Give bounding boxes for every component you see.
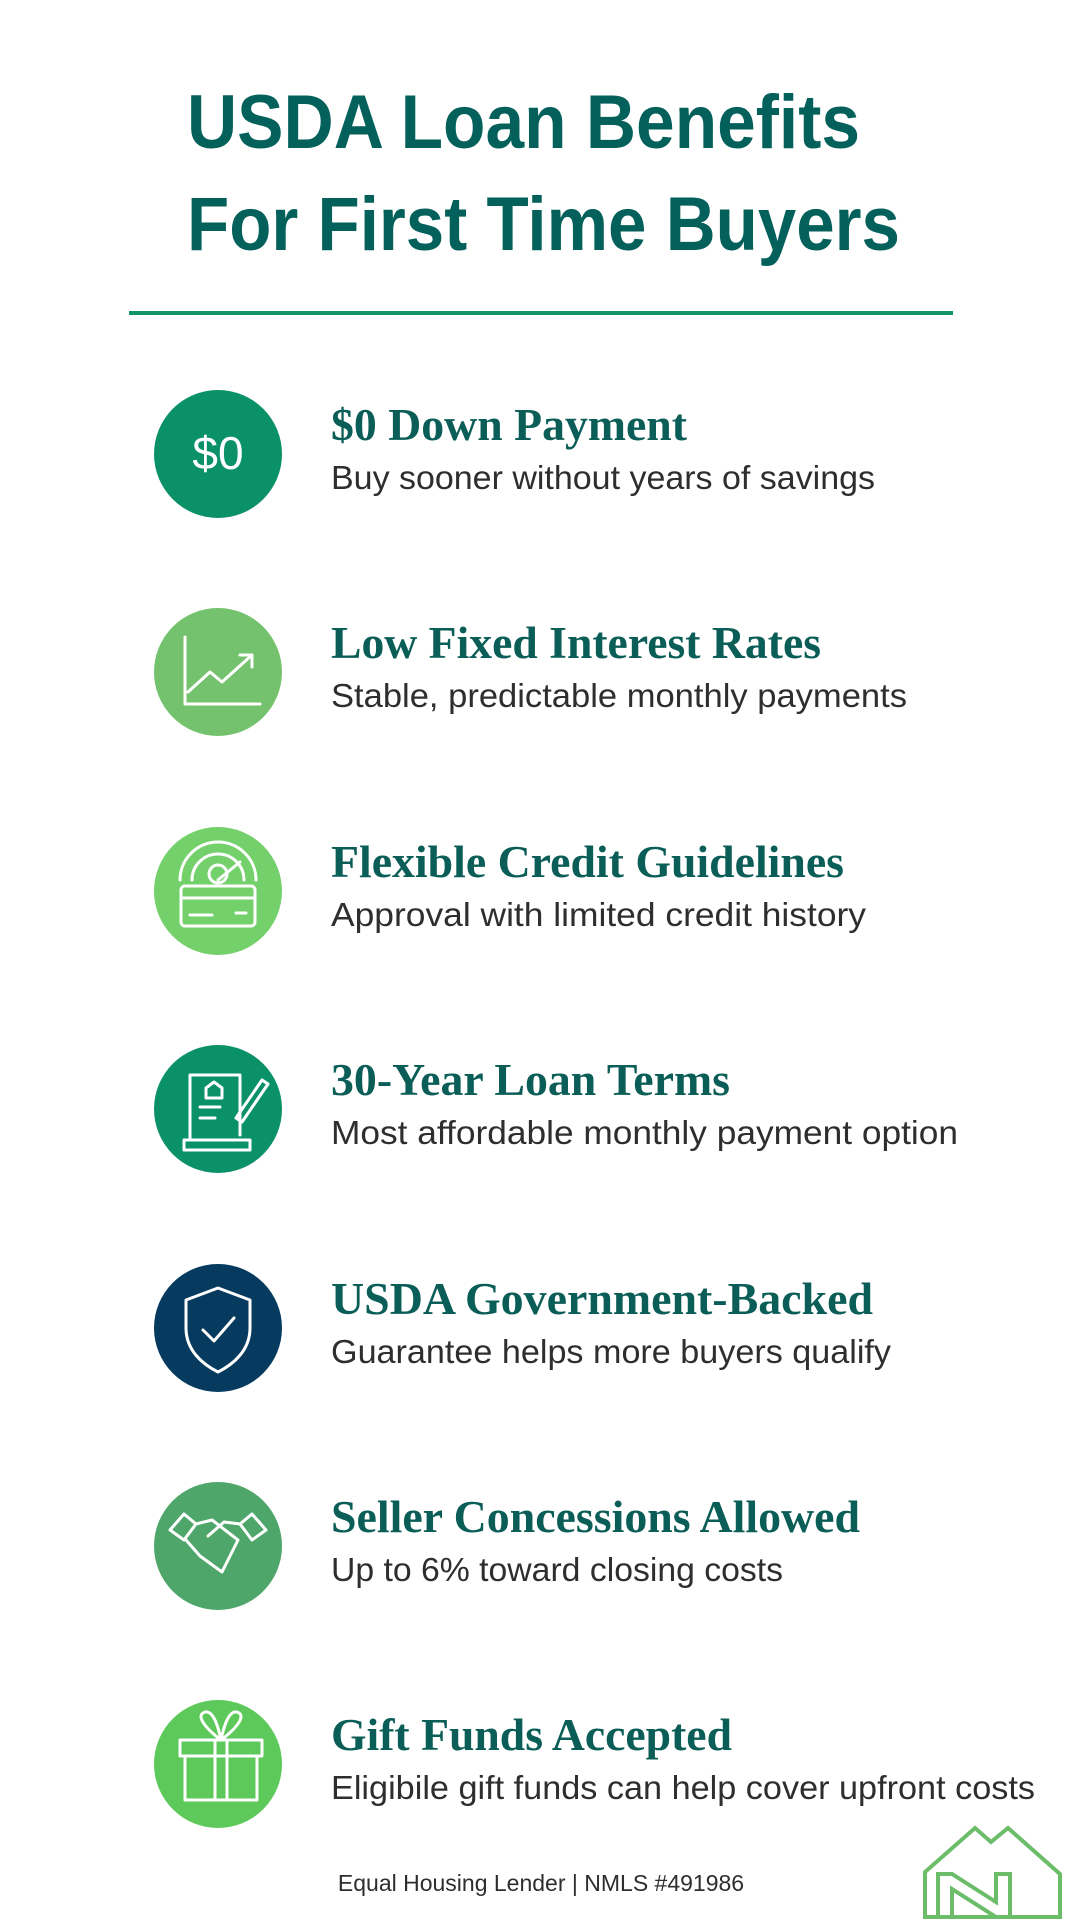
title [187, 80, 900, 267]
item 5: government backed: USDA Government-Backed [331, 1274, 873, 1324]
icon: chart [154, 608, 282, 736]
item 2: low fixed rates: Stable, predictable monthly payments [331, 677, 907, 714]
item 2: low fixed rates [154, 608, 907, 736]
item 7: gift funds: Gift Funds Accepted [331, 1710, 732, 1760]
item 4: 30-year terms: Most affordable monthly payment option [331, 1114, 958, 1151]
item 1: $0 down payment: Buy sooner without years of savings [331, 459, 875, 496]
item 6: seller concessions [154, 1482, 860, 1610]
icon: $0: $0 [192, 427, 244, 479]
title: For First Time Buyers [187, 182, 900, 267]
icon: handshake [154, 1482, 282, 1610]
icon: gift [154, 1700, 282, 1828]
item 3: flexible credit: Flexible Credit Guidelines [331, 837, 844, 887]
footer text: Equal Housing Lender | NMLS #491986 [338, 1870, 744, 1896]
icon: contract with pen [154, 1045, 282, 1173]
item 5: government backed [154, 1264, 892, 1392]
item 6: seller concessions: Seller Concessions Allowed [331, 1492, 860, 1542]
item 7: gift funds: Eligibile gift funds can help cover upfront costs [331, 1769, 1035, 1806]
icon: shield check [154, 1264, 282, 1392]
title: USDA Loan Benefits [187, 80, 860, 165]
item 2: low fixed rates: Low Fixed Interest Rates [331, 618, 821, 668]
item 6: seller concessions: Up to 6% toward closing costs [331, 1551, 783, 1588]
item 5: government backed: Guarantee helps more buyers qualify [331, 1333, 892, 1370]
item 3: flexible credit [154, 827, 867, 955]
item 3: flexible credit: Approval with limited credit history [331, 896, 867, 933]
item 1: $0 down payment: $0 Down Payment [331, 400, 687, 450]
icon: credit gauge card [154, 827, 282, 955]
item 1: $0 down payment [154, 390, 875, 518]
logo: houses with N [925, 1828, 1060, 1917]
item 4: 30-year terms [154, 1045, 958, 1173]
item 4: 30-year terms: 30-Year Loan Terms [331, 1055, 730, 1105]
icon: $0 [154, 390, 282, 518]
item 7: gift funds [154, 1700, 1035, 1828]
